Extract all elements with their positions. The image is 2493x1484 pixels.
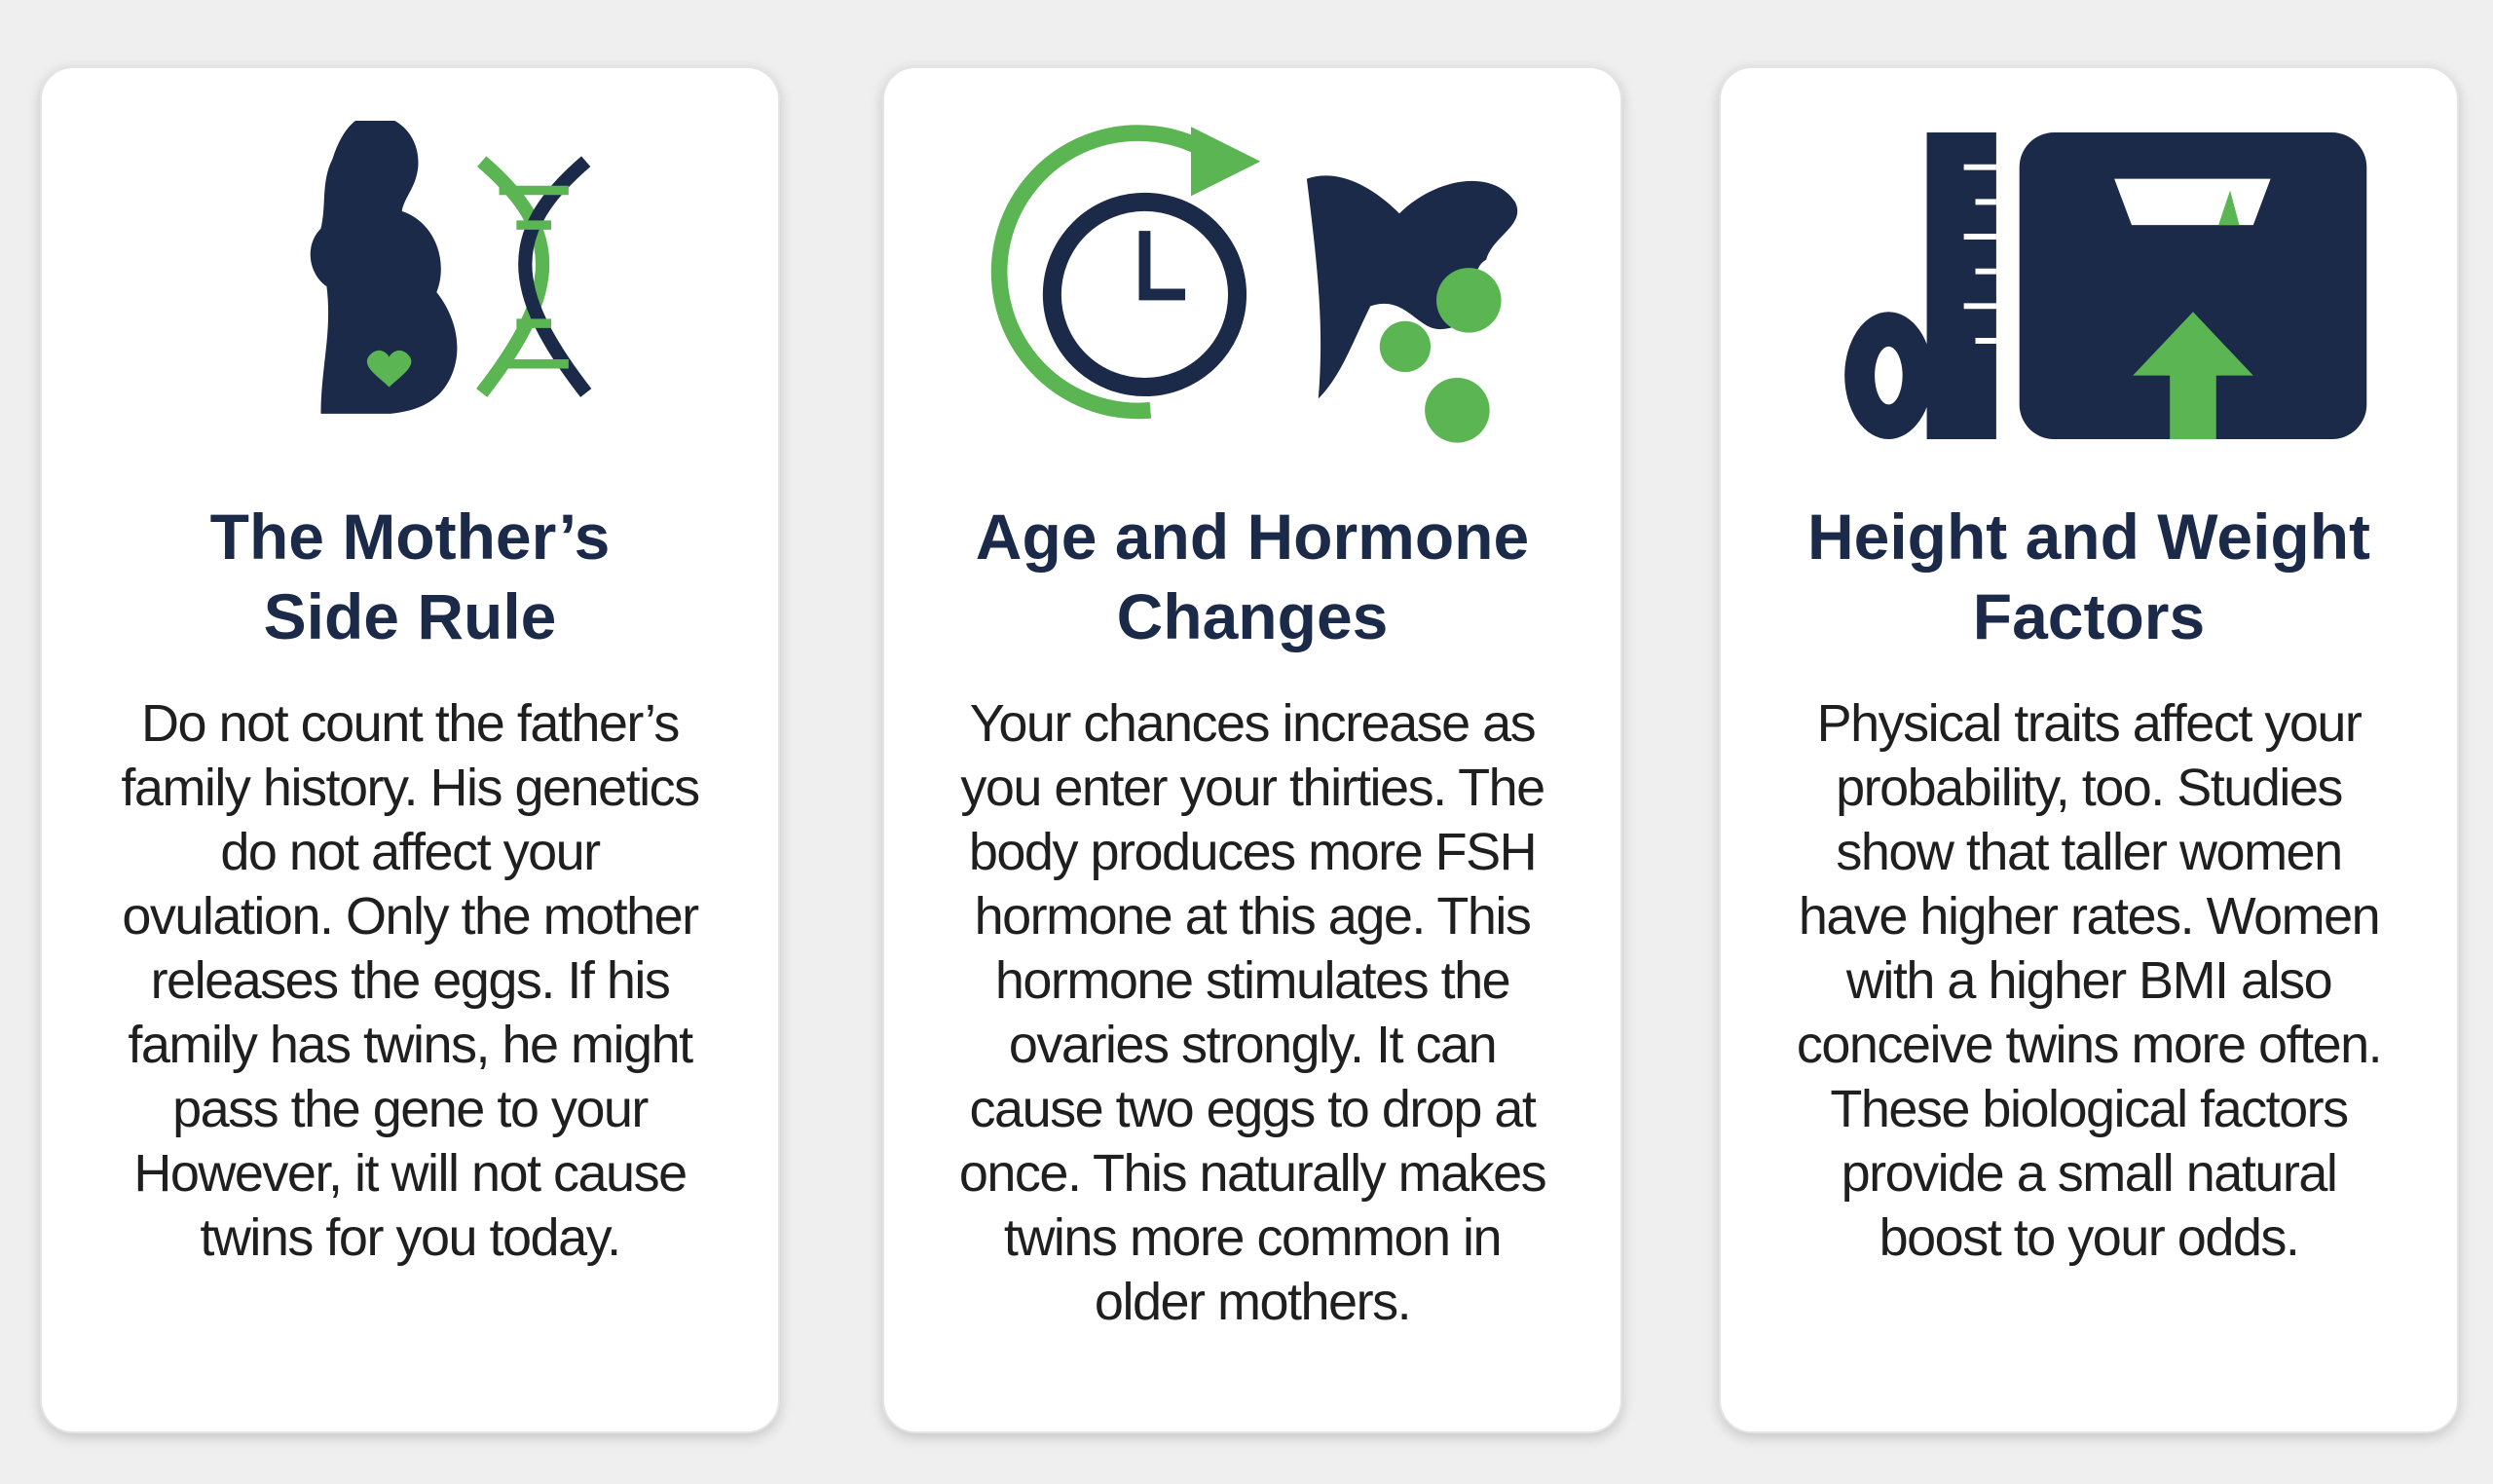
text block: releases the eggs. If his [151, 951, 669, 1010]
title [976, 501, 1529, 652]
text block: hormone stimulates the [995, 951, 1509, 1010]
text block: twins more common in [1004, 1208, 1501, 1267]
text block: Your chances increase as [970, 694, 1535, 753]
text block: with a higher BMI also [1846, 951, 2331, 1010]
text block: pass the gene to your [172, 1080, 648, 1138]
text block: probability, too. Studies [1836, 759, 2342, 817]
panel: age and hormone [882, 66, 1622, 1433]
text block: family history. His genetics [121, 759, 699, 817]
text block: provide a small natural [1842, 1144, 2336, 1203]
text block: do not affect your [220, 823, 600, 881]
text block: you enter your thirties. The [960, 759, 1544, 817]
title: Changes [1117, 580, 1388, 652]
title: The Mother’s [210, 501, 610, 573]
text block: cause two eggs to drop at [970, 1080, 1535, 1138]
text block: once. This naturally makes [959, 1144, 1545, 1203]
text block: show that taller women [1836, 823, 2342, 881]
text block: boost to your odds. [1879, 1208, 2298, 1267]
text block: have higher rates. Women [1799, 887, 2379, 946]
icon: clock and ovaries [991, 125, 1517, 443]
panel: mother's side rule [40, 66, 780, 1433]
panel: height and weight [1719, 66, 2459, 1433]
icon: pregnant woman and DNA [310, 121, 592, 414]
text block: body produces more FSH [969, 823, 1536, 881]
text block [121, 694, 699, 1267]
text block [959, 694, 1545, 1331]
text block: family has twins, he might [128, 1016, 692, 1074]
title [1807, 501, 2370, 652]
text block: However, it will not cause [133, 1144, 687, 1203]
text block: twins for you today. [200, 1208, 620, 1267]
title [210, 501, 610, 652]
text block: ovaries strongly. It can [1009, 1016, 1496, 1074]
text block: hormone at this age. This [975, 887, 1530, 946]
title: Age and Hormone [976, 501, 1529, 573]
title: Side Rule [264, 580, 556, 652]
text block: Physical traits affect your [1817, 694, 2361, 753]
text block: conceive twins more often. [1797, 1016, 2381, 1074]
title: Height and Weight [1807, 501, 2370, 573]
text block: Do not count the father’s [141, 694, 679, 753]
text block: older mothers. [1095, 1273, 1410, 1331]
title: Factors [1973, 580, 2205, 652]
text block: ovulation. Only the mother [122, 887, 698, 946]
icon: tape measure and scale [1844, 132, 2366, 440]
text block [1797, 694, 2381, 1267]
text block: These biological factors [1830, 1080, 2348, 1138]
